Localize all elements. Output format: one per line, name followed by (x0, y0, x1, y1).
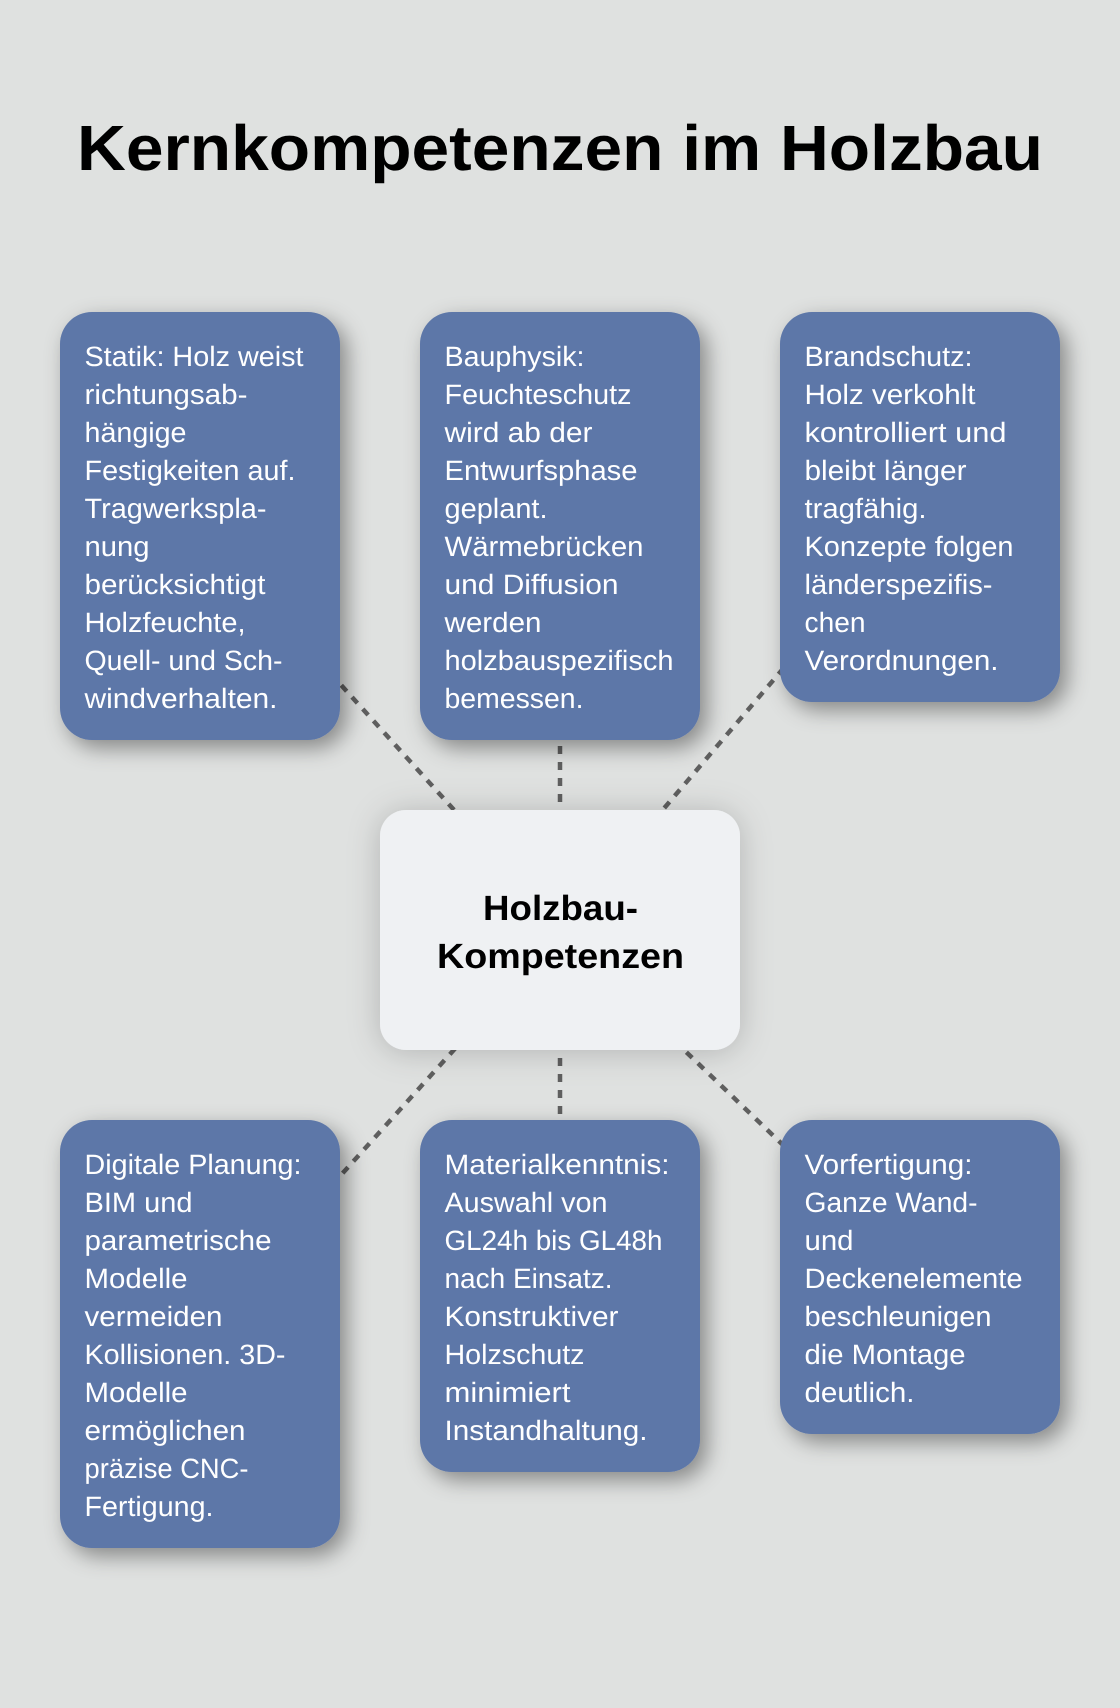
panel: center node (380, 810, 740, 1050)
center label: Kompetenzen (437, 937, 684, 976)
card text: geplant. (444, 493, 548, 524)
card text: Holzfeuchte, (84, 607, 246, 638)
card text (83, 341, 304, 714)
card background (60, 312, 340, 740)
card text: Tragwerkspla- (84, 493, 266, 524)
connector: center to Vorfertigung (686, 1052, 783, 1145)
card text: präzise CNC- (84, 1453, 248, 1484)
connector: center to Materialkenntnis (558, 1042, 562, 1122)
center box (380, 810, 740, 1050)
card text: Auswahl von (444, 1187, 608, 1218)
card text: Modelle (84, 1377, 188, 1408)
panel: Vorfertigung (780, 1120, 1060, 1434)
card text (804, 341, 1014, 676)
card text: nung (84, 531, 150, 562)
card text: holzbauspezifisch (444, 645, 674, 676)
connector: center to Digitale Planung (341, 1048, 455, 1175)
card text: bemessen. (444, 683, 584, 714)
panel: Statik (60, 312, 340, 740)
card background (420, 312, 700, 740)
card text: BIM und (84, 1187, 192, 1218)
card text: GL24h bis GL48h (444, 1225, 662, 1256)
card text: Quell- und Sch- (84, 645, 282, 676)
card text: Fertigung. (84, 1491, 214, 1522)
connector: center to Brandschutz (664, 670, 782, 808)
card background (780, 1120, 1060, 1434)
card text: länderspezifis- (804, 569, 992, 600)
connector: Bauphysik to center (558, 730, 562, 812)
card text: Holzschutz (444, 1339, 584, 1370)
card background (780, 312, 1060, 702)
panel: Brandschutz (780, 312, 1060, 702)
card text: vermeiden (84, 1301, 222, 1332)
card background (60, 1120, 340, 1548)
card text: Bauphysik: (444, 341, 584, 372)
card text: und Diffusion (444, 569, 618, 600)
card text: deutlich. (804, 1377, 914, 1408)
card text: bleibt länger (804, 455, 966, 486)
card text: chen (804, 607, 866, 638)
card text: minimiert (444, 1377, 571, 1408)
card text: Brandschutz: (804, 341, 972, 372)
card text: wird ab der (443, 417, 592, 448)
card text: die Montage (804, 1339, 966, 1370)
card text: Entwurfsphase (444, 455, 638, 486)
card text: Ganze Wand- (804, 1187, 978, 1218)
card text (444, 1149, 670, 1446)
card text: Instandhaltung. (444, 1415, 648, 1446)
card text: werden (443, 607, 542, 638)
card text: nach Einsatz. (444, 1263, 612, 1294)
connector: Statik to center (341, 685, 455, 811)
card text: kontrolliert und (804, 417, 1006, 448)
title: Kernkompetenzen im Holzbau (77, 112, 1043, 184)
connectors (341, 670, 783, 1175)
card text: Feuchteschutz (444, 379, 632, 410)
card text (84, 1149, 302, 1522)
panel: Digitale Planung (60, 1120, 340, 1548)
card text: ermöglichen (84, 1415, 246, 1446)
card text: Kollisionen. 3D- (84, 1339, 286, 1370)
card text: Wärmebrücken (444, 531, 644, 562)
card text: Konstruktiver (444, 1301, 618, 1332)
center label: Holzbau- (483, 889, 638, 928)
card text: richtungsab- (84, 379, 247, 410)
card text: Festigkeiten auf. (84, 455, 296, 486)
panel: Bauphysik (420, 312, 700, 740)
card text: Deckenelemente (804, 1263, 1022, 1294)
center label (437, 889, 684, 976)
card text: Konzepte folgen (804, 531, 1014, 562)
card text: und (804, 1225, 854, 1256)
card text: hängige (84, 417, 186, 448)
card text: Digitale Planung: (84, 1149, 302, 1180)
card text (443, 341, 674, 714)
panel: Materialkenntnis (420, 1120, 700, 1472)
card text: Materialkenntnis: (444, 1149, 670, 1180)
card text: windverhalten. (83, 683, 278, 714)
card text: Vorfertigung: (804, 1149, 972, 1180)
card background (420, 1120, 700, 1472)
card text: Verordnungen. (804, 645, 998, 676)
card text: berücksichtigt (84, 569, 266, 600)
card text: Holz verkohlt (804, 379, 976, 410)
card text (804, 1149, 1022, 1408)
card text: Statik: Holz weist (84, 341, 304, 372)
card text: parametrische (84, 1225, 272, 1256)
card text: Modelle (84, 1263, 188, 1294)
card text: tragfähig. (804, 493, 926, 524)
card text: beschleunigen (804, 1301, 992, 1332)
